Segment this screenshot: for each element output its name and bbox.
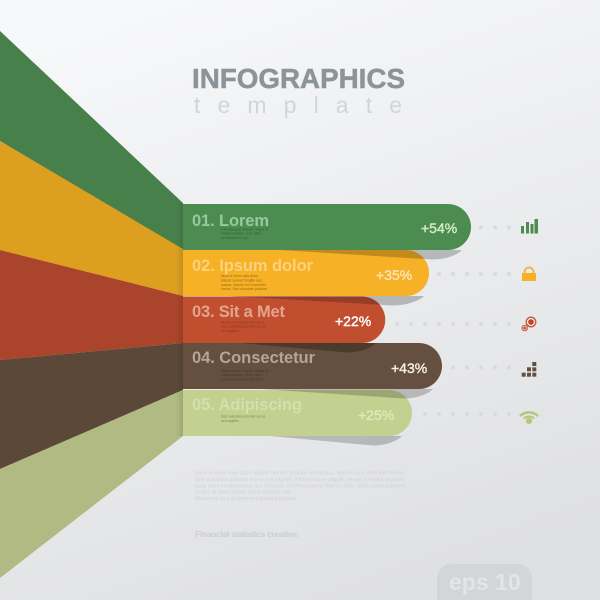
footer paragraph: Nunc a lorem quis diam aliquet laoreet fringilla sed massa. Mauris non imperdiet metus. xyxy=(195,470,405,476)
bar 1: Lorem: mattis sodales, nunc diam xyxy=(221,232,262,236)
bar 4: Consectetur: condimentum dui, tincidunt xyxy=(221,378,263,382)
title: template xyxy=(194,92,402,118)
bar 3: Sit a Met: Mauris non imperdiet metus, xyxy=(221,320,265,324)
bar 1: Lorem: +54% xyxy=(421,220,457,236)
bar 2: Ipsum dolor: metus. Sed vulputate pulvinar xyxy=(221,287,268,291)
icon: lock xyxy=(522,268,536,281)
bar 3: Sit a Met: Sed vulputate pulvinar purus xyxy=(221,324,266,328)
dotted leader lines xyxy=(395,226,511,416)
bar 3: Sit a Met xyxy=(183,296,385,352)
bar 2: Ipsum dolor xyxy=(183,250,429,306)
bar 2: Ipsum dolor: aliquet laoreet fringilla sed xyxy=(221,278,262,282)
icon: bar chart xyxy=(521,219,538,234)
bar 1: Lorem xyxy=(183,204,471,260)
bar 1: Lorem: Pellentesque aliquet, neque id xyxy=(221,227,268,231)
bar 2: Ipsum dolor: 02. Ipsum dolor xyxy=(192,257,314,275)
footer paragraph xyxy=(195,470,405,502)
icon: wifi xyxy=(520,412,538,424)
bar 2: Ipsum dolor: Nunc a lorem quis diam xyxy=(221,274,258,278)
bar 3: Sit a Met: +22% xyxy=(335,313,371,329)
bar 1: Lorem: 01. Lorem xyxy=(192,212,269,230)
icon: stepped blocks xyxy=(522,362,536,377)
bar 4: Consectetur xyxy=(183,343,442,398)
eps badge xyxy=(437,564,532,600)
bar 5: Adipiscing: sed sagittis. xyxy=(221,419,240,423)
title: INFOGRAPHICS xyxy=(192,63,405,94)
footer paragraph: Sed vulputate pulvinar purus sed sagittis. Pellentesque aliquet, neque id mattis sodales, xyxy=(195,477,405,483)
bar 1: Lorem: condimentum dui xyxy=(221,236,248,240)
footer paragraph: nunc diam condimentum dui, tincidunt commodo purus felis eu odio. Morbi porta euismod xyxy=(195,484,405,490)
bar 5: Adipiscing: +25% xyxy=(358,407,394,423)
bar 2: Ipsum dolor: massa. Mauris non imperdiet xyxy=(221,283,266,287)
title xyxy=(192,63,405,118)
bar 2: Ipsum dolor: +35% xyxy=(376,267,412,283)
footer caption: Financial statistics creative. xyxy=(195,529,299,539)
bar 4: Consectetur: Pellentesque aliquet, neque id xyxy=(221,369,268,373)
bar 4: Consectetur: 04. Consectetur xyxy=(192,349,316,367)
bar 5: Adipiscing: Sed vulputate pulvinar purus xyxy=(221,414,266,418)
footer paragraph: Aliquam id arcu at amet sem placerat tristique. xyxy=(195,496,298,502)
bar 5: Adipiscing: 05. Adipiscing xyxy=(192,396,302,414)
bar 4: Consectetur: +43% xyxy=(391,360,427,376)
bar 5: Adipiscing xyxy=(183,390,412,446)
fan bands xyxy=(0,31,183,578)
eps badge: eps 10 xyxy=(449,569,521,595)
bar 3: Sit a Met: sed sagittis. xyxy=(221,329,240,333)
bar 3: Sit a Met: 03. Sit a Met xyxy=(192,303,286,321)
icon: targets xyxy=(522,317,536,331)
footer paragraph: iaculis, sit amet lobortis lorem tincidunt sed. xyxy=(195,490,291,496)
bar 4: Consectetur: mattis sodales, nunc diam xyxy=(221,373,262,377)
